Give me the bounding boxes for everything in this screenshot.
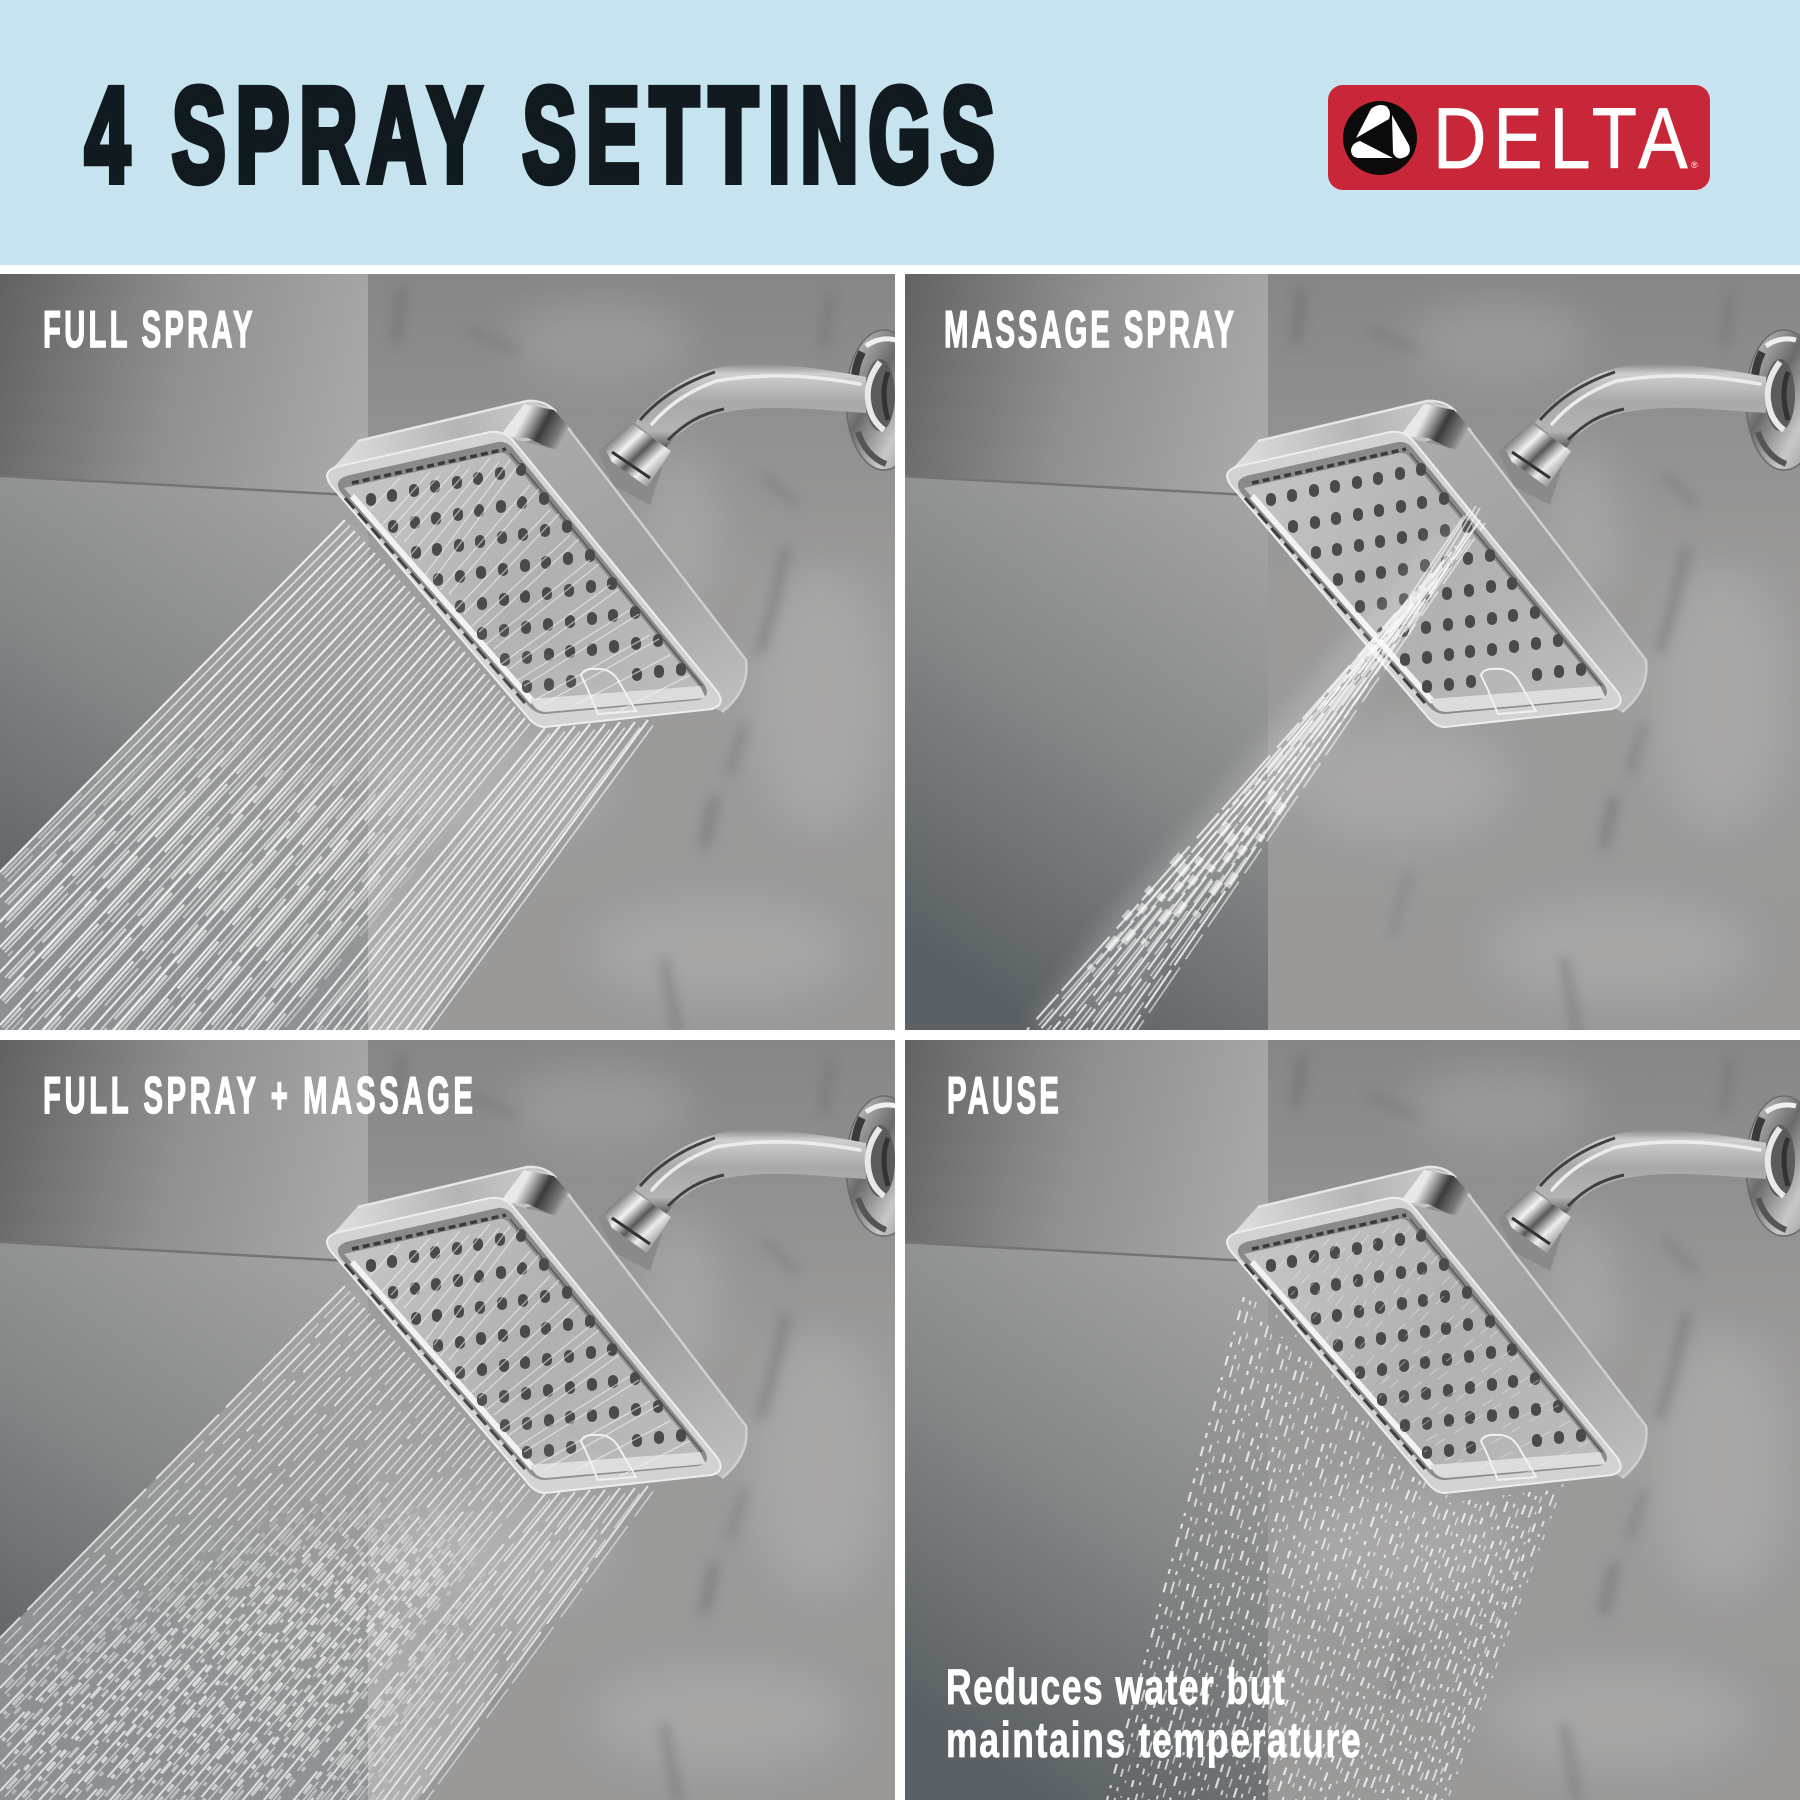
photo: shower head with massage jet — [905, 274, 1800, 1030]
caption: pause description — [946, 1660, 1361, 1769]
registered mark: ® — [1691, 160, 1698, 170]
label: massage spray: MASSAGE SPRAY — [944, 300, 1234, 358]
label: full spray + massage: FULL SPRAY + MASSAGE — [43, 1066, 473, 1124]
Delta logo — [1328, 85, 1710, 190]
panel: pause — [900, 1036, 1800, 1800]
panel: massage spray — [900, 270, 1800, 1044]
title: 4 SPRAY SETTINGS — [85, 61, 995, 210]
panel: full spray + massage — [0, 1036, 922, 1800]
panel: full spray — [0, 270, 922, 1049]
caption: pause description: maintains temperature — [946, 1713, 1361, 1769]
logo wordmark: DELTA — [1433, 90, 1688, 186]
photo: shower head with full spray — [0, 274, 895, 1030]
label: pause: PAUSE — [947, 1066, 1059, 1124]
photo: shower head with full spray and massage — [0, 1040, 895, 1800]
caption: pause description: Reduces water but — [946, 1660, 1285, 1716]
icon: Delta triangle mark — [1343, 101, 1417, 175]
logo badge — [1328, 85, 1710, 190]
header band — [0, 0, 1800, 265]
label: full spray: FULL SPRAY — [43, 300, 253, 358]
photo: shower head with trickle droplets — [905, 1040, 1800, 1800]
